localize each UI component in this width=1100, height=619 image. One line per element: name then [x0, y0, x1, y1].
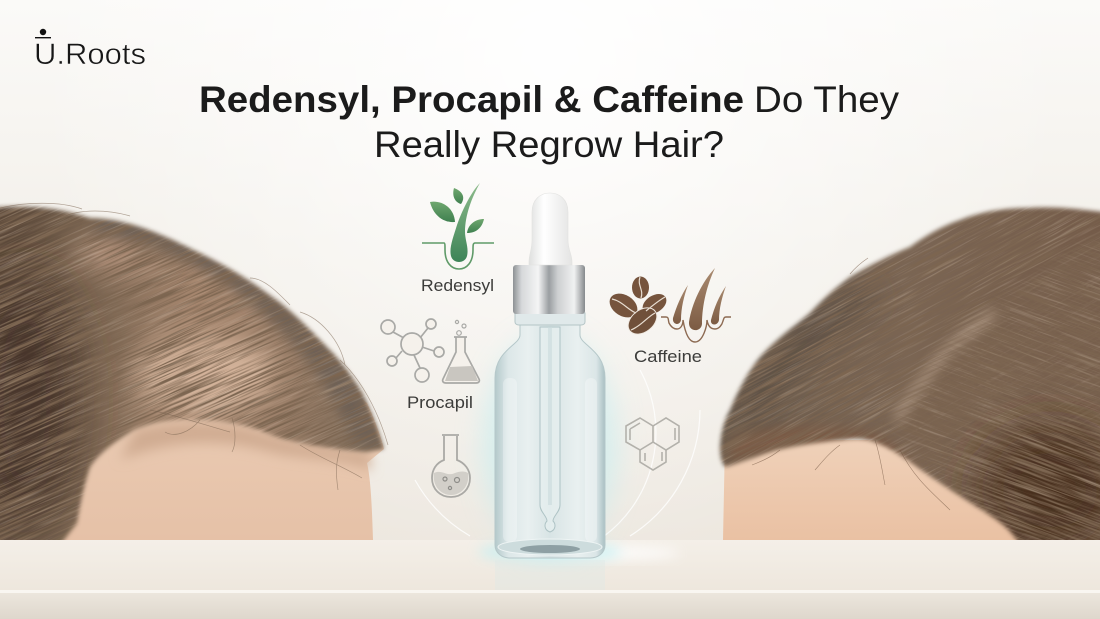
wispy hairs — [0, 203, 388, 490]
icon: Redensyl follicle and leaves — [422, 183, 494, 269]
title: Redensyl, Procapil & Caffeine — [199, 79, 744, 120]
concentric glow arcs — [415, 370, 700, 537]
fine flyaway hairs — [752, 258, 950, 510]
bottle glow — [478, 335, 622, 563]
icon: Procapil conical flask — [443, 320, 479, 383]
icon: caffeine hair follicles — [661, 268, 731, 342]
title: Do They — [754, 79, 900, 120]
label: Redensyl: Redensyl — [421, 276, 494, 295]
neck — [515, 313, 585, 325]
pipette — [540, 327, 560, 532]
metal collar — [513, 265, 585, 314]
title: Really Regrow Hair? — [374, 124, 724, 165]
logo: U.Roots: U.Roots — [34, 38, 146, 71]
glass base — [498, 539, 602, 555]
label: Procapil: Procapil — [407, 393, 473, 412]
photo: thinning hairline (left head) — [0, 190, 400, 545]
parting scalp — [897, 312, 995, 420]
icon: hexagon molecule — [626, 418, 679, 470]
thin crown scalp — [135, 337, 275, 413]
rubber bulb — [529, 193, 572, 265]
icon: coffee beans — [605, 276, 670, 340]
bottle reflection — [495, 560, 605, 590]
serum dropper bottle — [495, 193, 605, 590]
icon: round flask — [432, 435, 470, 497]
title — [199, 79, 900, 165]
glass body — [495, 323, 605, 558]
icon: Procapil molecule — [381, 319, 444, 382]
label: Caffeine: Caffeine — [634, 347, 702, 366]
photo: full hairline (right head) — [715, 200, 1100, 550]
table top — [0, 540, 1100, 619]
